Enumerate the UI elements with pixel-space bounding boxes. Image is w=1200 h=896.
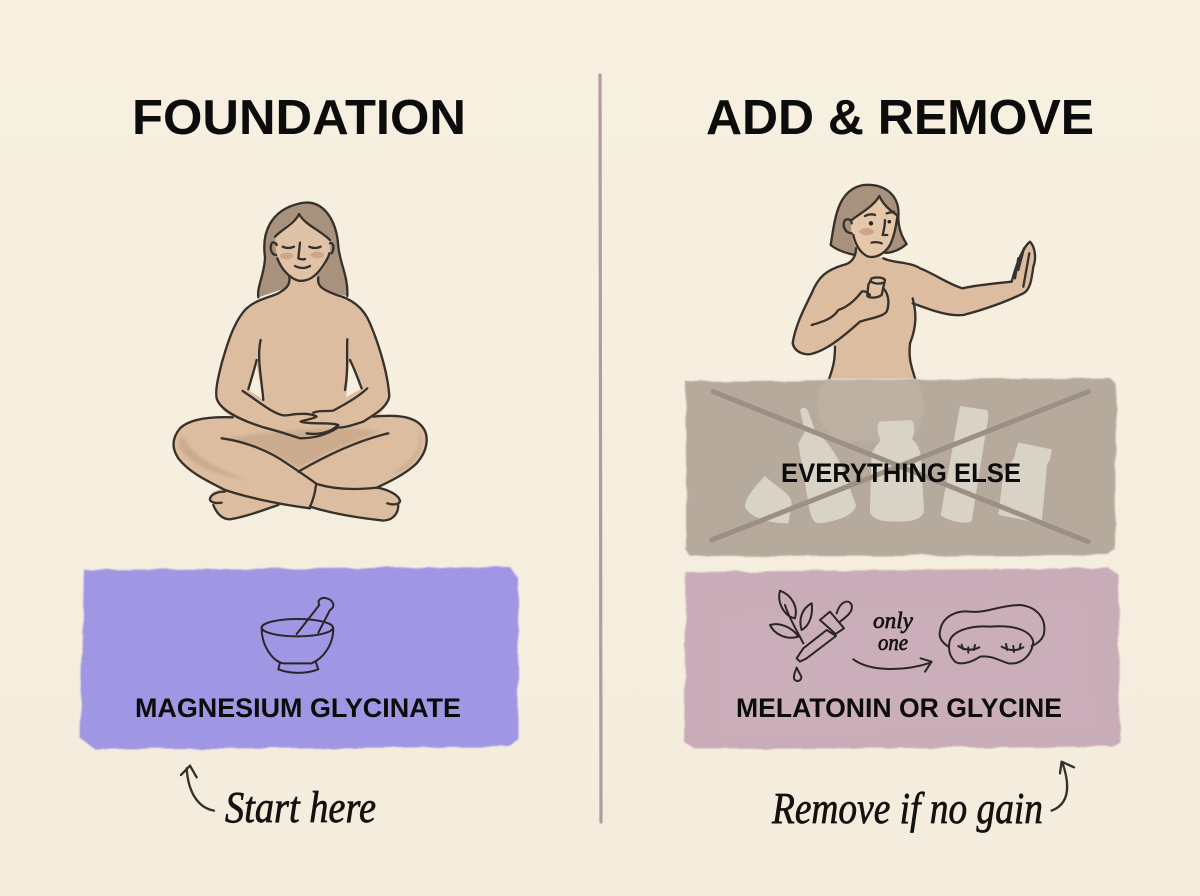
- handwritten: start here: Start here: [225, 783, 376, 832]
- heading: add and remove: ADD & REMOVE: [706, 91, 1094, 145]
- label: magnesium glycinate: MAGNESIUM GLYCINATE: [135, 693, 461, 723]
- panel: magnesium glycinate: [80, 567, 518, 749]
- icon: mortar and pestle: [262, 598, 333, 673]
- heading: foundation: FOUNDATION: [132, 91, 466, 145]
- icon: crossed-out bottles: [745, 406, 1052, 523]
- figure: person holding bottle, palm raised: [793, 185, 1035, 378]
- label: everything else: EVERYTHING ELSE: [781, 458, 1021, 488]
- arrow: remove if no gain: [1052, 762, 1074, 811]
- icon: herb, dropper, only one arrow, sleep mask: [770, 591, 1044, 681]
- panel: melatonin or glycine: [684, 568, 1120, 749]
- label: melatonin or glycine: MELATONIN OR GLYCINE: [736, 693, 1062, 723]
- arrow: start here: [181, 766, 214, 811]
- handwritten: remove if no gain: Remove if no gain: [771, 784, 1043, 833]
- figure: meditating person: [174, 203, 428, 521]
- faded torso behind panel: [817, 379, 923, 442]
- handwritten: only one: [873, 608, 914, 655]
- handwritten: only one: only: [873, 608, 914, 633]
- handwritten: only one: one: [878, 630, 908, 655]
- panel: everything else (crossed out): [686, 378, 1116, 556]
- divider line: [600, 75, 601, 822]
- icon: large X: [712, 392, 1088, 542]
